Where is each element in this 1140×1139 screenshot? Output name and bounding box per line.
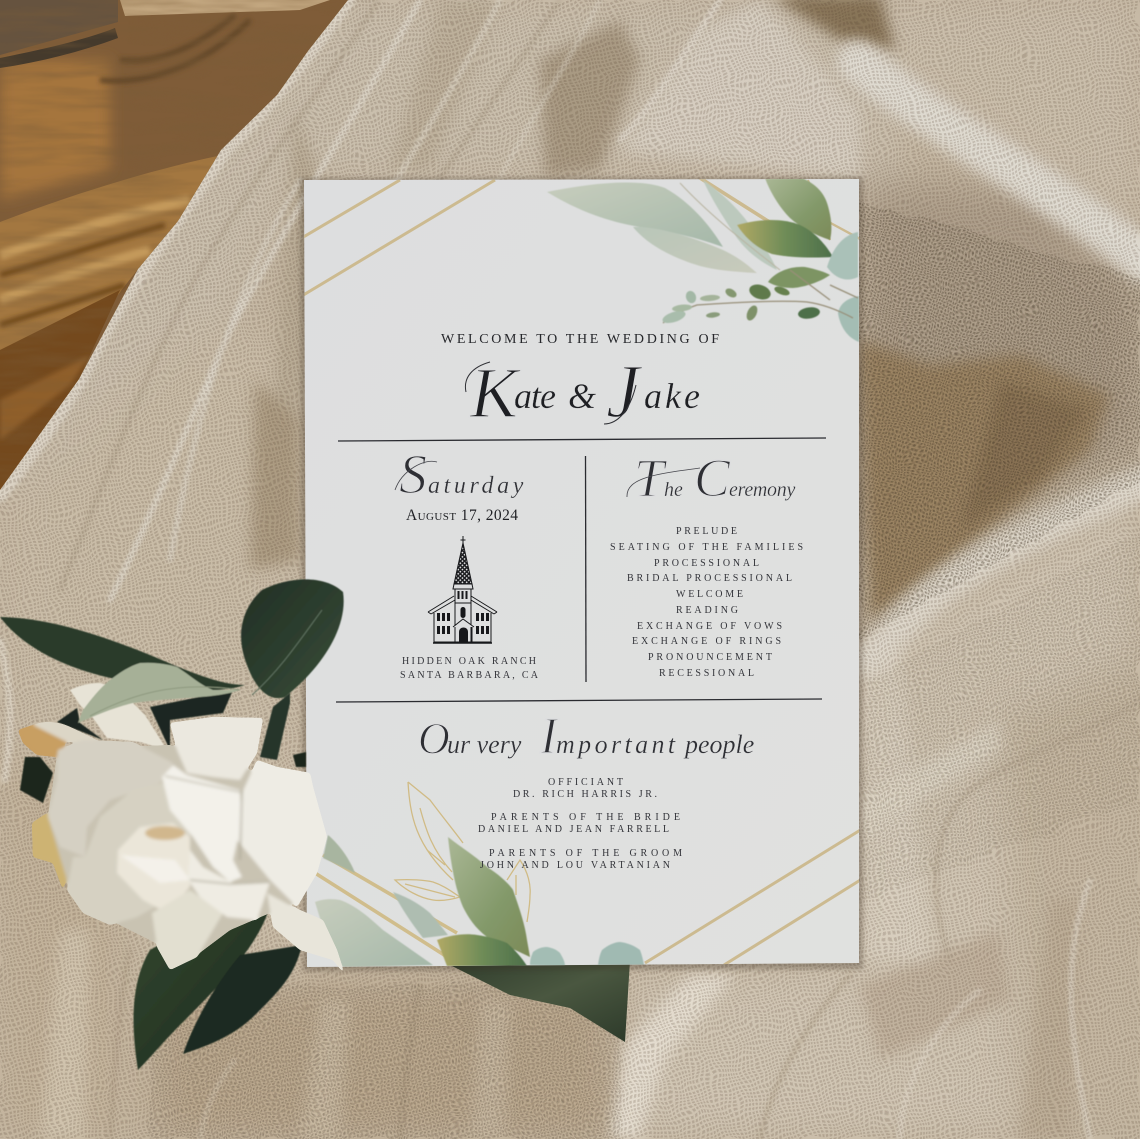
ceremony order list: PRELUDE	[676, 526, 737, 537]
heading: The Ceremony: T	[634, 448, 668, 508]
ceremony order list: PRONOUNCEMENT	[648, 652, 772, 663]
flower: white gardenia	[18, 717, 345, 975]
date: August 17, 2024	[406, 507, 518, 524]
heading: couple names: &	[568, 376, 596, 416]
heading: couple names: ate	[514, 376, 556, 416]
important people list	[478, 777, 682, 871]
heading: important people: mportant	[556, 730, 679, 759]
ceremony order list: PROCESSIONAL	[654, 558, 759, 569]
important people list: DR. RICH HARRIS JR.	[513, 789, 657, 800]
heading: important people: ur very	[447, 730, 522, 759]
ceremony order list: BRIDAL PROCESSIONAL	[627, 573, 792, 584]
foliage: bottom left corner	[315, 782, 644, 967]
icon: church	[428, 536, 497, 643]
important people list: PARENTS OF THE GROOM	[489, 848, 682, 859]
greenery: dark leaves behind flower	[0, 579, 344, 1070]
cloth ridges	[858, 62, 1140, 660]
ceremony order list	[610, 526, 803, 679]
heading: welcome line: WELCOME TO THE WEDDING OF	[441, 332, 719, 347]
ceremony order list: RECESSIONAL	[659, 668, 754, 679]
venue text: SANTA BARBARA, CA	[400, 670, 539, 681]
important people list: OFFICIANT	[548, 777, 623, 788]
ceremony order list: READING	[676, 605, 738, 616]
important people list: DANIEL AND JEAN FARRELL	[478, 824, 669, 835]
heading: Saturday: S	[399, 444, 427, 506]
venue text: HIDDEN OAK RANCH	[402, 656, 536, 667]
heading: Saturday: aturday	[428, 473, 527, 499]
background: wooden table	[0, 0, 350, 500]
leaf under card bottom edge	[440, 960, 630, 1042]
important people list: JOHN AND LOU VARTANIAN	[480, 860, 670, 871]
foliage: top right corner	[547, 178, 859, 342]
divider: top	[338, 438, 826, 441]
ceremony order list: EXCHANGE OF VOWS	[637, 621, 782, 632]
heading: Saturday	[395, 444, 527, 506]
heading: couple names	[465, 350, 703, 434]
ceremony order list: EXCHANGE OF RINGS	[632, 636, 781, 647]
divider: lower	[336, 699, 822, 702]
heading: important people: I	[539, 708, 560, 765]
divider: vertical	[584, 456, 587, 682]
ceremony order list: WELCOME	[676, 589, 743, 600]
heading: important people: people	[683, 730, 754, 759]
heading: The Ceremony	[627, 448, 795, 508]
heading: The Ceremony: C	[694, 448, 731, 508]
heading: couple names: K	[469, 353, 522, 433]
ceremony order list: SEATING OF THE FAMILIES	[610, 542, 803, 553]
heading: The Ceremony: eremony	[729, 479, 795, 501]
heading: important people: O	[418, 714, 450, 763]
heading: couple names: ake	[644, 376, 703, 416]
heading: The Ceremony: he	[664, 479, 683, 501]
important people list: PARENTS OF THE BRIDE	[491, 812, 680, 823]
gold frame lines	[300, 178, 862, 965]
heading: couple names: J	[606, 350, 643, 434]
panel: program card	[300, 178, 862, 967]
card shadow	[300, 177, 863, 971]
venue text	[400, 656, 539, 681]
